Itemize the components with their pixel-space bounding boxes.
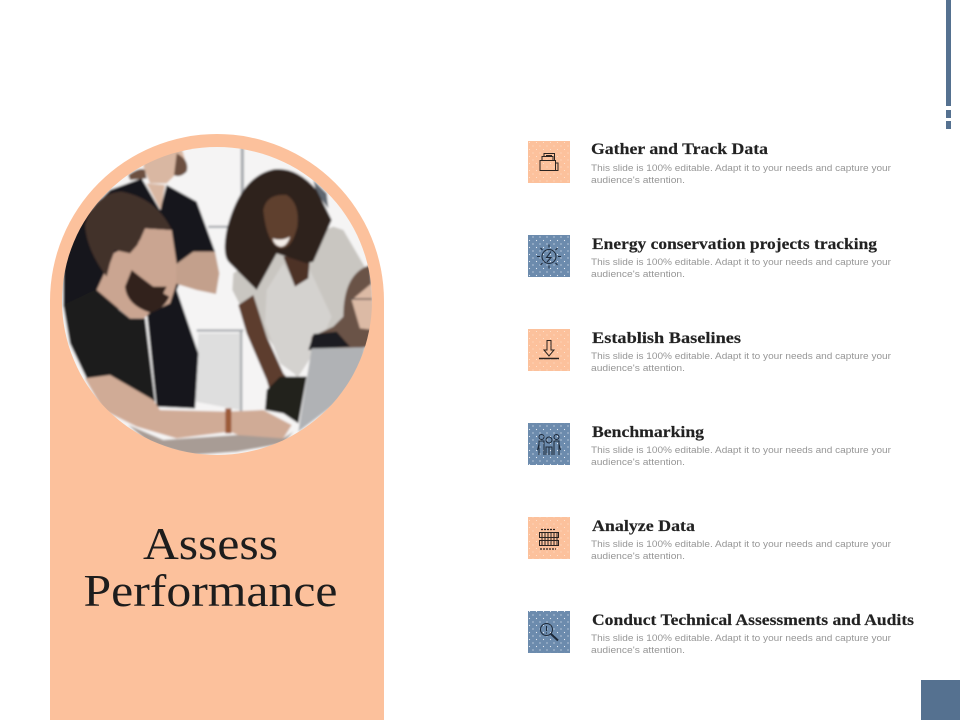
text block: This slide is 100% editable. Adapt it to your needs and capture your [591, 351, 891, 361]
text block: This slide is 100% editable. Adapt it to your needs and capture your [591, 445, 891, 455]
icon: folder with documents [528, 141, 570, 183]
item: Analyze Data [528, 517, 891, 561]
text block: This slide is 100% editable. Adapt it to your needs and capture your [591, 633, 891, 643]
heading: Establish Baselines [592, 330, 741, 347]
text block: audience's attention. [591, 551, 685, 561]
panel: arch [50, 134, 384, 720]
text block: This slide is 100% editable. Adapt it to your needs and capture your [591, 539, 891, 549]
item: Benchmarking [528, 423, 891, 467]
text block: audience's attention. [591, 457, 685, 467]
photo: team around laptop [62, 147, 372, 455]
heading: Analyze Data [592, 518, 695, 535]
text block: audience's attention. [591, 645, 685, 655]
icon: group of people [528, 423, 570, 465]
decorative bar top right [946, 0, 951, 129]
title: Assess [143, 519, 278, 569]
heading: Energy conservation projects tracking [592, 236, 877, 253]
icon: data table [528, 517, 570, 559]
item: Energy conservation projects tracking [528, 235, 891, 279]
text block: This slide is 100% editable. Adapt it to your needs and capture your [591, 163, 891, 173]
title: Performance [84, 566, 338, 616]
title [84, 519, 338, 616]
text block: audience's attention. [591, 269, 685, 279]
item: Conduct Technical Assessments and Audits [528, 611, 914, 655]
text block: This slide is 100% editable. Adapt it to your needs and capture your [591, 257, 891, 267]
item: Establish Baselines [528, 329, 891, 373]
item: Gather and Track Data [528, 141, 891, 185]
decorative square bottom right [921, 680, 960, 720]
heading: Benchmarking [592, 424, 704, 441]
icon: arrow down to line [528, 329, 570, 371]
icon: magnifier [528, 611, 570, 653]
text block: audience's attention. [591, 175, 685, 185]
text block: audience's attention. [591, 363, 685, 373]
heading: Gather and Track Data [591, 141, 768, 158]
icon: energy bolt sun [528, 235, 570, 277]
heading: Conduct Technical Assessments and Audits [592, 612, 914, 629]
